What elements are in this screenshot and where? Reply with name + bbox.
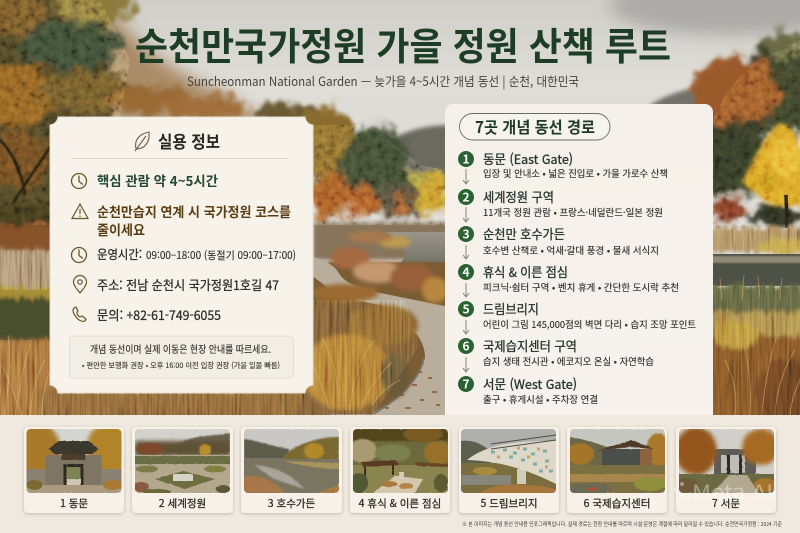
- stop 5: 드림브리지: [483, 299, 539, 318]
- stop 6: 국제습지센터 구역: [483, 336, 577, 355]
- icon: clock: [72, 174, 86, 188]
- note box: • 편안한 보행화 권장 • 오후 16:00 이전 입장 권장 (가을 일몰 빠름): [82, 360, 280, 371]
- walking path: [313, 257, 450, 415]
- panel card background: [50, 117, 313, 393]
- stop 7: 7: [462, 376, 470, 392]
- garden lawn: [300, 262, 450, 415]
- hazy slope left: [103, 14, 259, 116]
- left tree canopy: [0, 0, 320, 211]
- right meadow: [713, 281, 800, 415]
- far hills centre: [392, 122, 445, 192]
- row: address: 주소: 전남 순천시 국가정원1호길 47: [97, 275, 279, 294]
- fallen leaves: [385, 372, 440, 408]
- sky cloud shade: [610, 0, 800, 35]
- stop 2: 11개국 정원 관람 • 프랑스·네덜란드·일본 정원: [483, 205, 663, 219]
- golden tree trunk: [786, 195, 787, 228]
- row: opening hours: [72, 244, 296, 263]
- stop 7: 서문 (West Gate): [483, 374, 577, 393]
- photo card 2: world garden: 2 세계정원: [159, 496, 206, 511]
- row: contact: 문의: +82-61-749-6055: [97, 305, 221, 324]
- path kerb: [373, 358, 424, 413]
- icon: clock: [72, 248, 86, 262]
- golden tree right: [742, 124, 800, 206]
- photo card 5: dream bridge: 5 드림브리지: [480, 496, 538, 511]
- photo card 6: wetland centre: 6 국제습지센터: [584, 496, 650, 511]
- stop 5: 어린이 그림 145,000점의 벽면 다리 • 습지 조망 포인트: [483, 317, 696, 331]
- icon: leaf: [135, 132, 149, 151]
- photo card 1: east gate: [16, 423, 130, 513]
- stop 6: [458, 336, 654, 368]
- stop 6: 습지 생태 전시관 • 에코지오 온실 • 자연학습: [483, 354, 654, 368]
- stop 3: [458, 224, 659, 257]
- left tree trunks: [0, 138, 50, 206]
- foliage grain texture: [0, 0, 800, 225]
- row: wetland warning: 순천만습지 연계 시 국가정원 코스를: [97, 201, 291, 221]
- row: opening hours: 운영시간:: [97, 244, 142, 263]
- stop 4: 4: [462, 264, 470, 280]
- route panel background: [445, 104, 713, 415]
- photo card 4: rest and lunch: 4 휴식 & 이른 점심: [359, 496, 441, 511]
- photo card 6: wetland centre: [566, 427, 670, 513]
- stop 5: 5: [462, 300, 470, 318]
- arrow 4 to 5: [463, 283, 469, 297]
- middle tree line: [295, 107, 448, 220]
- stop 2: [458, 187, 663, 219]
- arrow 6 to 7: [463, 357, 469, 372]
- watermark: Meta AI: Meta AI: [692, 476, 773, 505]
- stop 6: 6: [462, 338, 470, 354]
- photo card 3: lake garden: 3 호수가든: [268, 496, 316, 511]
- arrow 3 to 4: [463, 245, 469, 259]
- watermark: Meta AI: [668, 476, 773, 505]
- photo card 2: world garden: [132, 427, 233, 513]
- stop 4: 휴식 & 이른 점심: [483, 262, 568, 281]
- right background trees: [691, 31, 800, 226]
- stop 3: 3: [462, 226, 470, 242]
- icon: map pin: [74, 276, 86, 293]
- stop 2: 세계정원 구역: [483, 187, 554, 206]
- arrow 1 to 2: [463, 169, 469, 184]
- grass clumps: [302, 231, 448, 410]
- photo card 3: lake garden: [241, 427, 342, 513]
- stop 7: 출구 • 휴게시설 • 주차장 연결: [483, 392, 598, 406]
- row: wetland warning: 줄이세요: [97, 219, 145, 239]
- note box: [70, 336, 294, 378]
- row: wetland warning: [72, 201, 291, 239]
- subtitle: Suncheonman National Garden — 늦가을 4~5시간 개념 동선 | 순천, 대한민국: [187, 71, 579, 90]
- foreground grass blades: [313, 335, 400, 410]
- sky: [115, 0, 800, 415]
- panel: practical information: [50, 117, 313, 393]
- row: core viewing time: 핵심 관람 약 4~5시간: [97, 170, 219, 190]
- icon: warning triangle: [72, 204, 88, 218]
- lake right: [705, 254, 800, 286]
- arrow 2 to 3: [463, 207, 469, 222]
- lake reflection: [705, 256, 800, 263]
- stop 1: 1: [462, 150, 470, 168]
- photo card 1: east gate: 1 동문: [60, 496, 88, 511]
- icon: phone: [73, 307, 86, 321]
- divider: [72, 158, 288, 159]
- stop 5: [458, 299, 696, 331]
- photo card 7: west gate: 7 서문: [712, 496, 740, 511]
- left grass strokes: [0, 335, 50, 415]
- stop 4: [458, 262, 679, 294]
- stop 3: 호수변 산책로 • 억새·갈대 풍경 • 물새 서식지: [483, 243, 659, 257]
- left ground plantings: [0, 205, 330, 430]
- right shore and reeds: [705, 228, 800, 255]
- stop 2: 2: [462, 188, 470, 206]
- stop 1: [458, 149, 668, 180]
- note box: 개념 동선이며 실제 이동은 현장 안내를 따르세요.: [90, 341, 271, 356]
- arrow 5 to 6: [463, 320, 469, 334]
- stop 4: 피크닉·쉼터 구역 • 벤치 휴게 • 간단한 도시락 추천: [483, 280, 679, 294]
- far hills right: [648, 86, 715, 126]
- middle ground: [313, 222, 448, 260]
- stop 1: 동문 (East Gate): [483, 149, 573, 168]
- stop 1: 입장 및 안내소 • 넓은 진입로 • 가을 가로수 산책: [483, 166, 668, 180]
- lake centre: [385, 232, 445, 263]
- photo card 5: dream bridge: [459, 427, 559, 513]
- panel heading: 실용 정보: [158, 128, 220, 153]
- grass streak texture: [0, 228, 800, 415]
- title: 순천만국가정원 가을 정원 산책 루트: [135, 16, 671, 71]
- panel: 7 stop route: [445, 104, 713, 415]
- panel heading: [135, 128, 220, 153]
- right reed strokes: [720, 275, 800, 415]
- route heading pill: 7곳 개념 동선 경로: [475, 114, 595, 138]
- stop 7: [458, 374, 598, 406]
- bottom strip background: [0, 415, 800, 533]
- row: opening hours: 09:00–18:00 (동절기 09:00–17:00): [146, 248, 296, 263]
- photo card 4: rest and lunch: [349, 426, 452, 513]
- stop 3: 순천만 호수가든: [483, 224, 565, 243]
- photo card 7: west gate: [675, 427, 780, 513]
